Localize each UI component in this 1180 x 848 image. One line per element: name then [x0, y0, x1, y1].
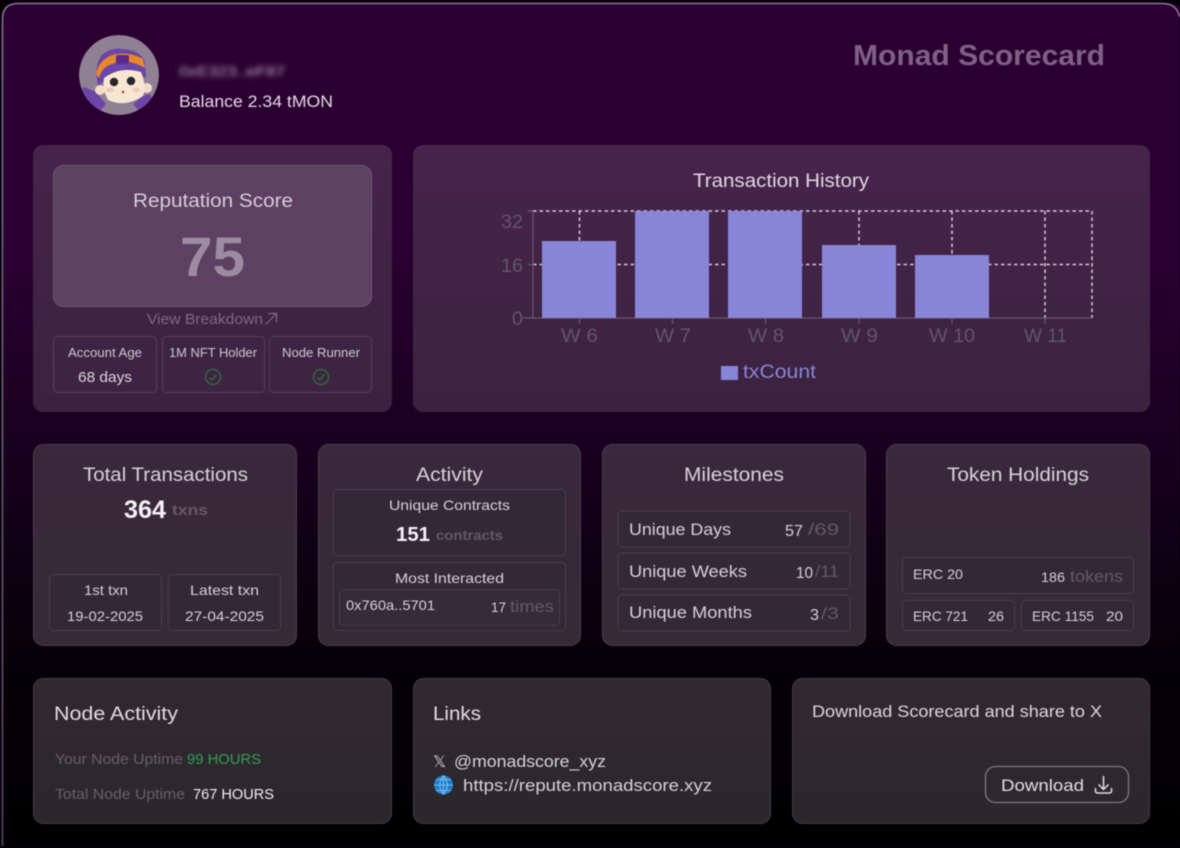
stat: node runner [270, 336, 372, 392]
most interacted: Most Interacted [395, 570, 504, 586]
title: Monad Scorecard [853, 40, 1105, 72]
bar chart [501, 211, 1092, 347]
stat: 1M NFT holder: 1M NFT Holder [169, 345, 258, 360]
heading: Token Holdings [947, 464, 1089, 486]
ERC 1155 [1022, 600, 1134, 630]
chart legend: txCount [743, 362, 817, 383]
interacted address: 0x760a..5701 [346, 597, 435, 613]
unique weeks: 10 [796, 565, 813, 582]
score value: 75 [180, 225, 245, 288]
heading: Transaction History [693, 170, 869, 192]
bar chart: W 8 [748, 326, 784, 347]
total count [124, 496, 208, 524]
total node uptime [55, 787, 274, 803]
heading: Reputation Score [133, 190, 293, 212]
download button [986, 766, 1128, 802]
unique contracts: contracts [436, 527, 503, 543]
header: user profile [79, 35, 333, 115]
bar chart: 16 [501, 256, 523, 277]
ERC 20 [902, 558, 1134, 594]
interacted address: 17 [491, 599, 506, 615]
ERC 1155: ERC 1155 [1032, 608, 1094, 624]
ERC 1155: 20 [1106, 608, 1123, 624]
your node uptime: Your Node Uptime [55, 752, 183, 768]
latest transaction [168, 574, 280, 630]
ERC 721 [902, 600, 1014, 630]
stat: node runner: Node Runner [282, 345, 361, 360]
panel: reputation [33, 145, 392, 412]
your node uptime: 99 HOURS [187, 752, 261, 768]
heading: Download Scorecard and share to X [812, 702, 1102, 721]
unique contracts: 151 [396, 524, 430, 546]
most interacted [334, 562, 566, 630]
X handle: @monadscore_xyz [454, 752, 606, 771]
ERC 20: 186 [1041, 569, 1065, 585]
total node uptime: Total Node Uptime [55, 787, 185, 803]
unique weeks: Unique Weeks [629, 562, 747, 581]
bar chart: 32 [501, 212, 523, 233]
bar chart: W 10 [929, 326, 975, 347]
balance: Balance 2.34 tMON [179, 93, 333, 111]
unique weeks: /11 [815, 562, 839, 581]
panel: activity [318, 444, 580, 646]
unique contracts: Unique Contracts [389, 497, 510, 513]
heading: Milestones [684, 464, 784, 486]
bar chart: W 11 [1024, 326, 1067, 347]
unique weeks [618, 553, 850, 589]
reputation score box [54, 166, 372, 306]
panel: token holdings [886, 444, 1150, 646]
panel: milestones [602, 444, 866, 646]
unique days [618, 511, 850, 547]
heading: Node Activity [54, 703, 178, 725]
icon: download [1096, 776, 1112, 793]
website link: https://repute.monadscore.xyz [463, 776, 712, 795]
first transaction: 1st txn [84, 582, 128, 598]
panel: total transactions [34, 444, 296, 646]
interacted address: times [510, 597, 554, 616]
heading: Activity [416, 464, 483, 486]
latest transaction: Latest txn [190, 582, 259, 598]
stat: 1M NFT holder [162, 336, 264, 392]
heading: Total Transactions [83, 464, 248, 486]
total node uptime: 767 HOURS [193, 787, 274, 803]
bar chart: W 9 [841, 326, 878, 347]
ERC 20: ERC 20 [913, 566, 963, 582]
ERC 721: ERC 721 [913, 608, 968, 624]
download button: Download [1001, 776, 1084, 795]
panel: links [414, 678, 770, 824]
icon: avatar [79, 35, 159, 115]
unique months: Unique Months [629, 603, 752, 622]
heading: Links [433, 703, 481, 725]
first transaction [50, 574, 162, 630]
panel: transaction history [413, 145, 1150, 412]
unique contracts [334, 490, 566, 556]
bar chart: 0 [512, 309, 523, 330]
stat: account age [54, 336, 156, 392]
unique days: Unique Days [629, 520, 731, 539]
stat: account age: 68 days [78, 369, 132, 386]
unique months: /3 [821, 604, 839, 623]
first transaction: 19-02-2025 [67, 608, 143, 624]
stat: account age: Account Age [68, 345, 142, 360]
unique days: 57 [785, 523, 803, 540]
icon: check badge [206, 370, 220, 384]
wallet address (blurred): 0xE323..eF87 [179, 63, 285, 79]
unique months [618, 595, 850, 631]
interacted address [340, 590, 560, 626]
total count: txns [172, 502, 208, 519]
panel: node activity [34, 678, 392, 824]
unique months: 3 [810, 607, 819, 624]
bar chart: W 6 [561, 326, 598, 347]
X handle: 𝕏 [433, 752, 446, 771]
icon: globe [434, 776, 453, 794]
ERC 20: tokens [1070, 567, 1123, 586]
panel: download [792, 678, 1150, 824]
unique days: /69 [808, 520, 839, 539]
icon: check badge [314, 370, 328, 384]
chart legend [721, 362, 817, 383]
latest transaction: 27-04-2025 [185, 608, 264, 624]
your node uptime [55, 752, 261, 768]
bar chart: W 7 [655, 326, 691, 347]
total count: 364 [124, 496, 166, 524]
view breakdown link: View Breakdown [147, 312, 263, 328]
ERC 721: 26 [988, 608, 1004, 624]
